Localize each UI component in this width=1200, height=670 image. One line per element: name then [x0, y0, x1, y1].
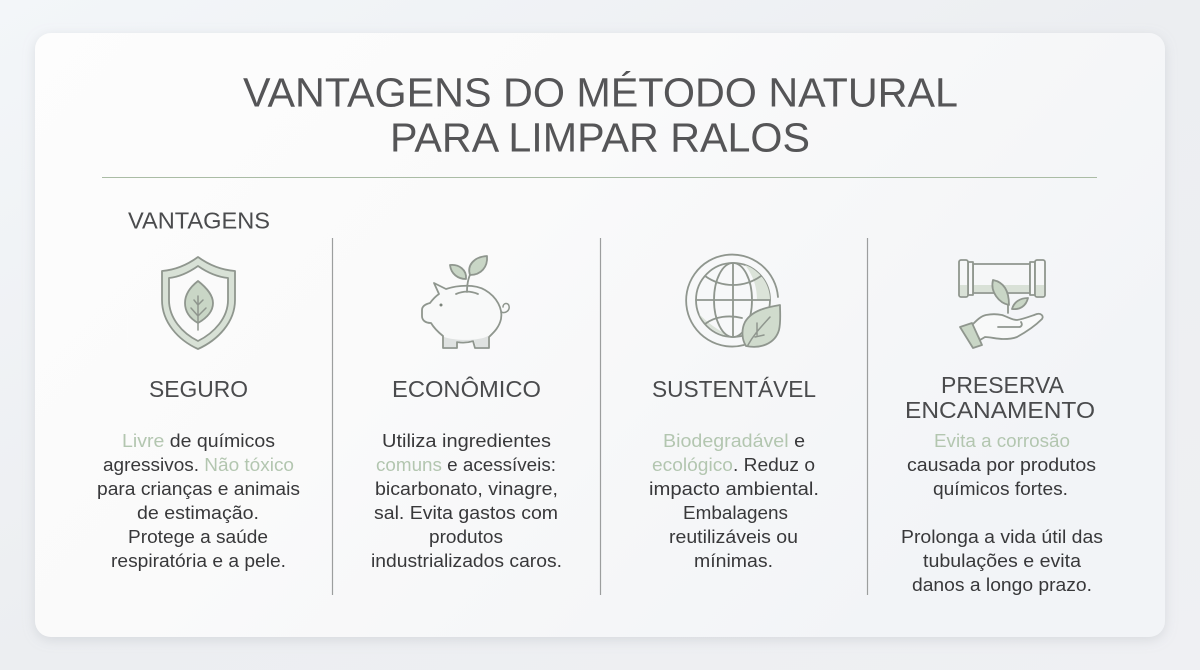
icon: shield with leaf — [162, 257, 235, 349]
text: seguro description: agressivos. Não tóxico — [103, 455, 294, 475]
text: economico description: Utiliza ingredientes — [382, 431, 551, 451]
heading: seguro: SEGURO — [149, 376, 248, 402]
text: seguro description — [97, 431, 300, 571]
text: preserva description — [901, 431, 1103, 595]
text: sustentavel description: reutilizáveis ou — [669, 527, 798, 547]
heading: economico: ECONÔMICO — [392, 375, 541, 402]
text: economico description: industrializados caros. — [371, 551, 562, 571]
heading: preserva encanamento: PRESERVA — [941, 372, 1065, 398]
text: economico description: produtos — [429, 527, 503, 547]
text: sustentavel description — [649, 431, 819, 571]
panel: sustentavel — [649, 255, 819, 571]
icon: pipe, sprout and hand — [959, 260, 1045, 348]
text: sustentavel description: ecológico . Reduz o — [652, 455, 815, 475]
icon: piggy bank with sprout — [422, 256, 509, 348]
title: PARA LIMPAR RALOS — [390, 114, 810, 160]
text: economico description — [371, 431, 562, 571]
text: preserva description: Evita a corrosão — [934, 431, 1070, 451]
text: economico description: comuns e acessíveis: — [376, 455, 556, 475]
icon: globe with leaf — [686, 255, 780, 347]
panel: seguro — [97, 257, 300, 571]
text: sustentavel description: impacto ambiental. — [649, 479, 819, 499]
title — [243, 70, 958, 160]
heading: sustentavel: SUSTENTÁVEL — [652, 376, 816, 402]
text: sustentavel description: Biodegradável e — [663, 431, 805, 451]
text: preserva description: Prolonga a vida útil das — [901, 527, 1103, 547]
text: preserva description: causada por produtos — [907, 455, 1096, 475]
text: sustentavel description: mínimas. — [694, 551, 773, 571]
text: seguro description: Livre de químicos — [122, 431, 275, 451]
text: seguro description: de estimação. — [137, 503, 259, 523]
heading: preserva encanamento — [905, 372, 1095, 423]
heading: preserva encanamento: ENCANAMENTO — [905, 397, 1095, 423]
panel: preserva encanamento — [901, 260, 1103, 595]
text: economico description: bicarbonato, vinagre, — [375, 479, 558, 499]
text: seguro description: Protege a saúde — [128, 527, 268, 547]
text: seguro description: respiratória e a pele. — [111, 551, 286, 571]
panel: economico — [371, 256, 562, 571]
text: economico description: sal. Evita gastos com — [374, 503, 558, 523]
text: preserva description: tubulações e evita — [923, 551, 1082, 571]
title: VANTAGENS DO MÉTODO NATURAL — [243, 70, 958, 116]
text: preserva description: químicos fortes. — [933, 479, 1068, 499]
text: preserva description: danos a longo prazo. — [912, 575, 1092, 595]
text: seguro description: para crianças e animais — [97, 479, 300, 499]
text: sustentavel description: Embalagens — [683, 503, 788, 523]
section heading: vantagens: VANTAGENS — [128, 208, 270, 234]
